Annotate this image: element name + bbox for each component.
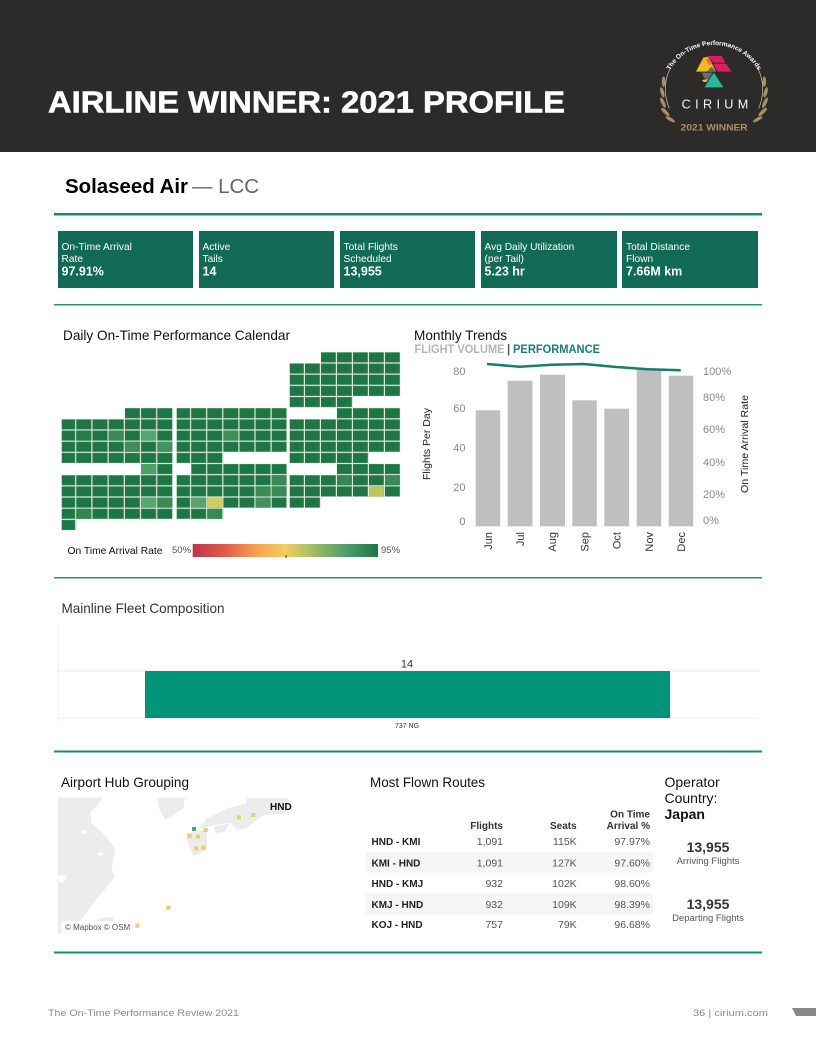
calendar colour legend: On Time Arrival Rate — [68, 545, 163, 557]
left axis labels: 0 — [459, 516, 466, 528]
stat: arriving flights: Arriving Flights — [677, 856, 740, 867]
route row: KMI - HND: 97.60% — [614, 858, 650, 870]
KPI: on-time arrival rate: 97.91% — [62, 264, 104, 278]
airline name heading — [65, 176, 259, 198]
table header — [470, 810, 650, 832]
map heading: Airport Hub Grouping — [61, 774, 189, 790]
monthly trends heading: Monthly Trends — [414, 327, 507, 343]
monthly trends subtitle legend: PERFORMANCE — [513, 344, 600, 356]
routes heading: Most Flown Routes — [370, 774, 485, 790]
fleet bar: 737 NG — [145, 671, 670, 718]
route row: KMJ - HND — [372, 899, 650, 911]
KPI: on-time arrival rate — [58, 231, 193, 288]
left axis labels: 20 — [453, 482, 466, 494]
route row: KMJ - HND: 98.39% — [614, 899, 650, 911]
stat: arriving flights — [677, 839, 740, 867]
header banner — [0, 0, 816, 152]
KPI: on-time arrival rate: Rate — [62, 254, 83, 265]
map of Japan region — [58, 798, 288, 933]
calendar colour legend: 95% — [381, 545, 401, 556]
right axis labels: 80% — [703, 392, 725, 404]
KPI: total distance flown — [622, 231, 758, 288]
left axis labels: 80 — [453, 366, 466, 378]
KPI: total flights scheduled: Total Flights — [344, 242, 398, 253]
left axis labels — [453, 366, 466, 528]
KPI: active tails: 14 — [202, 264, 216, 278]
KPI: average daily utilization — [481, 231, 617, 288]
left axis title: Flights Per Day — [421, 407, 433, 480]
route row: KOJ - HND: 757 — [485, 919, 503, 931]
KPI: on-time arrival rate: On-Time Arrival — [62, 242, 132, 253]
table header: Arrival % — [607, 821, 650, 832]
monthly trends subtitle legend: | — [507, 344, 510, 356]
right axis labels: 20% — [703, 489, 725, 501]
table header: Seats — [550, 821, 577, 832]
month labels: Jul — [515, 532, 527, 546]
KPI: average daily utilization: 5.23 hr — [484, 264, 525, 278]
route row: HND - KMI: 97.97% — [614, 836, 650, 848]
right axis labels: 60% — [703, 424, 725, 436]
panel: daily on-time performance calendar — [62, 327, 401, 558]
panel: monthly trends chart — [414, 327, 751, 552]
operator country heading: Operator — [664, 774, 720, 790]
calendar heatmap grid — [62, 352, 400, 531]
calendar colour legend — [68, 544, 401, 558]
month labels: Oct — [612, 532, 624, 549]
right axis title: On Time Arrival Rate — [739, 395, 751, 493]
right axis labels: 100% — [703, 366, 731, 378]
route row: KMJ - HND: KMJ - HND — [372, 900, 423, 911]
operator country heading — [664, 774, 720, 822]
map attribution: © Mapbox © OSM — [65, 923, 130, 932]
row stripes — [366, 852, 653, 914]
left axis labels: 60 — [453, 403, 466, 415]
route row: KMJ - HND: 109K — [552, 899, 577, 911]
hub label: HND — [270, 802, 292, 813]
map marker: green airport — [192, 827, 196, 831]
month labels: Nov — [644, 532, 656, 552]
route row: HND - KMJ: 102K — [552, 878, 577, 890]
table header: On Time — [610, 810, 650, 820]
map marker: yellow airports — [135, 813, 255, 928]
route row: HND - KMJ: 98.60% — [614, 878, 650, 890]
footer page number: 36 | cirium.com — [693, 1008, 768, 1019]
right axis labels: 40% — [703, 457, 725, 469]
stat: departing flights: Departing Flights — [672, 913, 744, 924]
KPI: active tails: Tails — [202, 254, 223, 265]
KPI: active tails: Active — [202, 242, 231, 253]
route row: KOJ - HND: KOJ - HND — [372, 920, 423, 931]
KPI: total flights scheduled: Scheduled — [344, 254, 392, 265]
route row: KOJ - HND: 96.68% — [614, 919, 650, 931]
panel: mainline fleet composition — [58, 600, 759, 730]
month labels: Dec — [676, 532, 688, 552]
route row: HND - KMJ: HND - KMJ — [372, 879, 423, 890]
stat: arriving flights: 13,955 — [687, 839, 730, 855]
KPI: total flights scheduled: 13,955 — [344, 264, 382, 278]
route row: HND - KMI: 1,091 — [477, 836, 503, 848]
stat: departing flights — [672, 896, 744, 924]
route row: KMI - HND: KMI - HND — [372, 858, 420, 870]
line: on-time arrival performance — [487, 364, 681, 370]
KPI: active tails — [199, 231, 334, 288]
right axis labels: 0% — [703, 515, 719, 527]
fleet bar value: 14 — [401, 658, 413, 670]
panel: operator country — [664, 774, 744, 924]
route row: HND - KMI: 115K — [553, 836, 577, 848]
route row: HND - KMI: HND - KMI — [372, 837, 421, 848]
KPI: average daily utilization: Avg Daily Utilization — [484, 242, 574, 253]
route row: HND - KMJ — [372, 878, 650, 890]
panel: most flown routes table — [366, 774, 653, 931]
KPI: total distance flown: 7.66M km — [626, 264, 682, 278]
right axis labels — [703, 366, 731, 527]
stat: departing flights: 13,955 — [687, 896, 730, 912]
route row: KOJ - HND — [372, 919, 650, 931]
table header: Flights — [470, 821, 503, 832]
fleet bar label: 737 NG — [395, 723, 419, 730]
panel: airport hub grouping map — [58, 774, 292, 933]
calendar heading: Daily On-Time Performance Calendar — [63, 327, 290, 343]
calendar colour legend: 50% — [172, 545, 192, 556]
KPI: average daily utilization: (per Tail) — [484, 254, 524, 265]
route row: KMI - HND: 127K — [552, 858, 577, 870]
fleet heading: Mainline Fleet Composition — [62, 600, 224, 616]
KPI cards — [58, 231, 758, 288]
operator country heading: Country: — [664, 790, 717, 806]
logo: Cirium 2021 winner award badge — [660, 40, 768, 133]
airline name heading: — LCC — [192, 176, 259, 198]
logo: Cirium 2021 winner award badge: CIRIUM — [682, 97, 748, 111]
KPI: total distance flown: Total Distance — [626, 242, 690, 253]
operator country heading: Japan — [664, 806, 705, 822]
left axis labels: 40 — [453, 442, 466, 454]
route row: HND - KMJ: 932 — [485, 878, 503, 890]
logo: Cirium 2021 winner award badge: 2021 WINNER — [681, 123, 748, 133]
route row: KOJ - HND: 79K — [558, 919, 577, 931]
monthly trends subtitle legend — [414, 344, 600, 356]
title: AIRLINE WINNER: 2021 PROFILE — [48, 84, 565, 120]
route row: KMI - HND — [372, 858, 650, 870]
footer publication title: The On-Time Performance Review 2021 — [48, 1008, 239, 1019]
footer — [48, 1008, 816, 1019]
airline name heading: Solaseed Air — [65, 176, 188, 198]
logo: Cirium 2021 winner award badge: The On-Time Performance Awards — [666, 40, 760, 70]
month labels: Sep — [580, 532, 592, 552]
KPI: total distance flown: Flown — [626, 254, 653, 265]
month labels: Jun — [483, 532, 495, 550]
footer tab shape — [792, 1008, 816, 1016]
month labels: Aug — [547, 532, 559, 552]
month labels — [483, 532, 688, 552]
route row: KMJ - HND: 932 — [485, 899, 503, 911]
route row: HND - KMI — [372, 836, 650, 848]
monthly trends subtitle legend: FLIGHT VOLUME — [414, 344, 505, 356]
bars: flights per day — [476, 370, 693, 526]
route row: KMI - HND: 1,091 — [477, 858, 503, 870]
KPI: total flights scheduled — [340, 231, 475, 288]
